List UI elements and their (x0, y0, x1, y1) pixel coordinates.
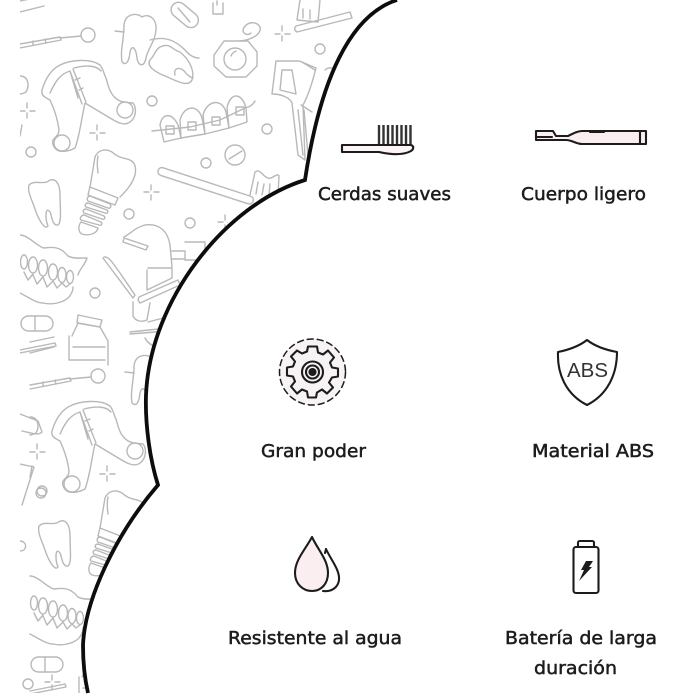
label: Batería de larga duración (505, 628, 657, 679)
feature: ABS material (532, 340, 654, 462)
label: Cerdas suaves: Cerdas suaves (318, 184, 451, 205)
feature: long battery life (505, 541, 657, 679)
feature: light body (521, 131, 646, 205)
feature: great power (261, 339, 367, 462)
label: Material ABS: Material ABS (532, 441, 654, 462)
icon: water drops (295, 537, 339, 591)
feature: soft bristles (318, 125, 451, 205)
label: Gran poder: Gran poder (261, 441, 367, 462)
label: Resistente al agua: Resistente al agua (228, 628, 402, 649)
icon: ABS shield: ABS (567, 360, 608, 382)
label: Batería de larga duración: duración (534, 658, 617, 679)
feature: water resistant (228, 537, 402, 649)
icon: electric toothbrush (536, 131, 646, 144)
icon: gear in dashed circle (280, 339, 346, 405)
label: Batería de larga duración: Batería de larga (505, 628, 657, 649)
curved black divider (83, 0, 397, 693)
label: Cuerpo ligero: Cuerpo ligero (521, 184, 646, 205)
icon: battery with bolt (574, 541, 598, 593)
dental doodle pattern background (20, 0, 362, 700)
icon: toothbrush with soft bristles (342, 125, 413, 154)
